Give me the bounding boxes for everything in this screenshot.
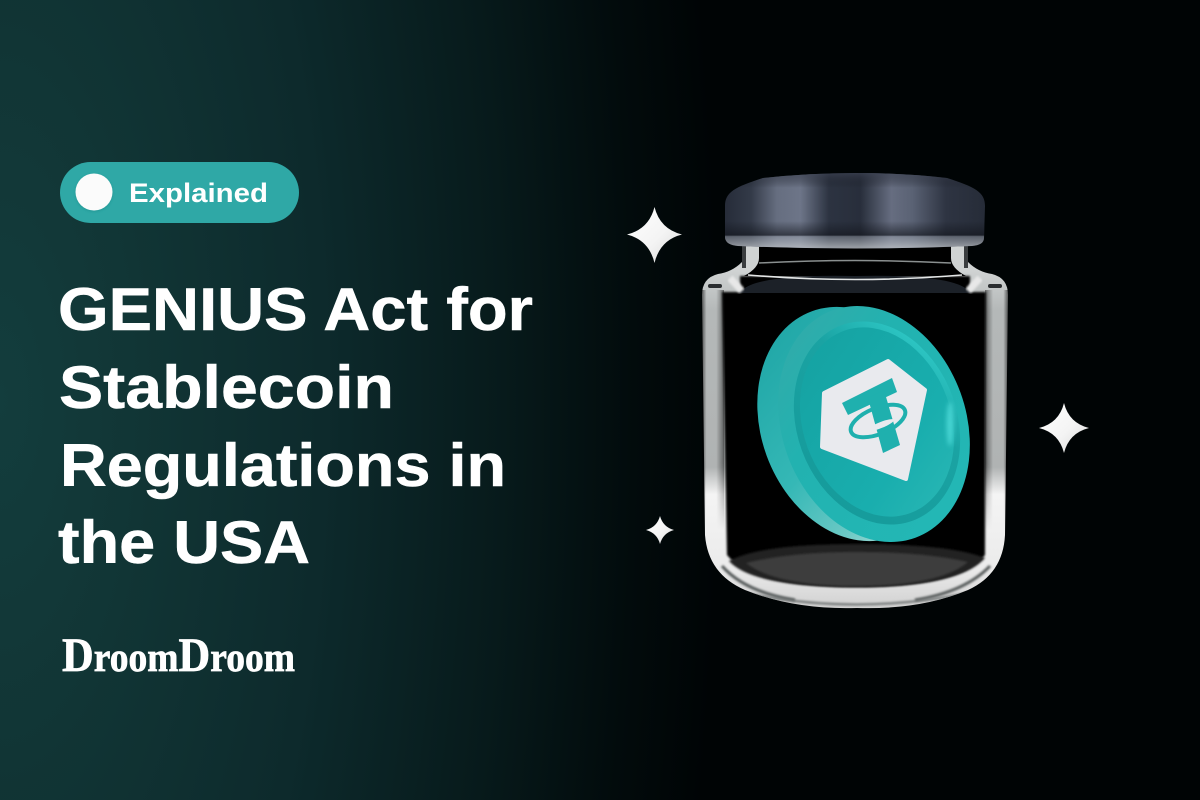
jar shoulder shading [708, 269, 1002, 293]
coin face [746, 279, 1002, 569]
title [58, 276, 533, 576]
tether symbol [842, 378, 910, 453]
sparkle: lower left [646, 516, 674, 544]
title: the USA [58, 509, 310, 576]
logo: DroomDroom: DroomDroom [62, 629, 295, 682]
sparkle: right [1039, 403, 1089, 453]
coin emblem [822, 361, 925, 479]
coin highlight [946, 402, 954, 446]
title: Regulations in [60, 432, 506, 499]
badge: Explained [60, 162, 299, 223]
jar lid [725, 173, 985, 248]
jar base [729, 544, 985, 587]
jar body glass [702, 246, 1008, 608]
title: Stablecoin [59, 354, 394, 421]
jar interior [722, 276, 986, 587]
coin [726, 279, 1002, 569]
jar wall shading [702, 290, 1008, 530]
coin recess [774, 306, 980, 538]
jar neck [742, 244, 968, 276]
badge dot [76, 174, 112, 210]
badge label: Explained [129, 178, 268, 208]
title: GENIUS Act for [58, 276, 533, 343]
sparkle: upper left [627, 207, 682, 263]
coin ring [766, 298, 988, 548]
coin edge [726, 280, 980, 568]
jar bottom reflections [722, 566, 990, 604]
illustration: glass jar with coin [702, 173, 1008, 608]
